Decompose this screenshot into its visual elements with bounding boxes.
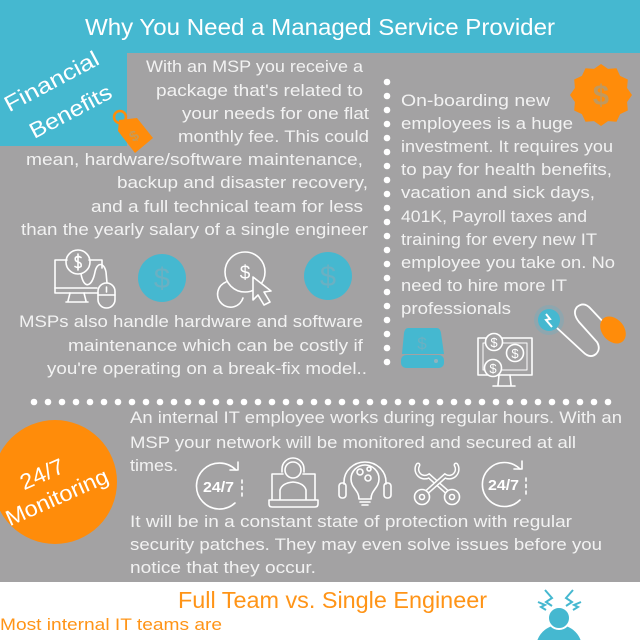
icon: support agent on laptop [269,458,318,507]
text block: MSP package: package that's related to [156,81,363,100]
icon: stressed person [536,590,582,640]
text block: internal IT employee [130,408,622,475]
text block: on-boarding: 401K, Payroll taxes and [401,207,587,226]
icon: teal dollar coin: $ [320,261,336,293]
panel: financial benefits label [0,46,127,146]
icon: 24/7 clock [196,462,242,509]
icon: monitor with coins: $ [511,346,519,361]
icon: coins with cursor: $ [240,263,251,284]
callout text: Monitoring [2,463,112,531]
text block: on-boarding [401,91,615,318]
label text [0,46,116,144]
icon: lightbulb with headphones [339,462,391,505]
icon: teal dollar coin: $ [154,263,170,295]
text block: internal IT employee: MSP your network will be monitored and secured at all [130,433,576,452]
title: Why You Need a Managed Service Provider [85,14,555,40]
text block: constant protection: notice that they occur. [130,558,316,577]
icon: monitor with coins: $ [490,335,498,350]
icon: crossed wrenches [414,465,460,504]
callout: 24/7 monitoring circle [0,420,117,544]
text block: internal IT employee: An internal IT employee works during regular hours. With an [130,408,622,427]
icon: coins with cursor [218,252,271,307]
icon: orange dollar badge: $ [593,80,609,112]
text block: most internal IT teams: Most internal IT teams are [0,615,222,634]
header band [0,0,640,53]
icon: orange dollar badge [570,64,632,126]
text block: maintenance [19,312,367,378]
text block: constant protection: It will be in a constant state of protection with regular [130,512,572,531]
text block: on-boarding: training for every new IT [401,230,597,249]
heading: full team vs single engineer: Full Team vs. Single Engineer [178,587,487,613]
text block: on-boarding: On-boarding new [401,91,551,110]
icon: teal dollar coin [138,254,186,302]
text block: MSP package: and a full technical team for less [91,197,363,216]
text block: MSP package: backup and disaster recovery, [117,173,368,192]
text block: maintenance: MSPs also handle hardware and software [19,312,363,331]
text block: on-boarding: employee you take on. No [401,253,615,272]
text block: MSP package: With an MSP you receive a [146,57,364,76]
text block: maintenance: maintenance which can be costly if [68,336,363,355]
text block: on-boarding: vacation and sick days, [401,183,595,202]
icon: teal dollar coin [304,252,352,300]
text block: on-boarding: to pay for health benefits, [401,160,612,179]
icon: price tag: $ [126,127,143,146]
text block: MSP package [21,57,369,239]
text block: maintenance: you're operating on a break-fix model.. [47,359,367,378]
icon: 24/7 clock: 24/7 [488,477,519,494]
icon: 24/7 clock [482,461,526,506]
text block: internal IT employee: times. [130,456,178,475]
icon: monitor with coins: $ [489,361,497,376]
icon: computer with coin and mouse [55,250,115,308]
icon: teal hard drive: $ [417,334,427,353]
text block: MSP package: mean, hardware/software maintenance, [26,150,363,169]
text block: on-boarding: investment. It requires you [401,137,613,156]
text block: MSP package: than the yearly salary of a single engineer [21,220,368,239]
text block: constant protection: security patches. They may even solve issues before you [130,535,602,554]
icon: monitor with coins [478,334,532,386]
text block: MSP package: your needs for one flat [182,104,369,123]
label text: Benefits [25,79,116,144]
text block: on-boarding: professionals [401,299,511,318]
icon: 24/7 clock: 24/7 [203,479,234,496]
icon: price tag [114,111,153,153]
label text: Financial [0,46,103,117]
icon: teal hard drive [401,328,444,368]
icon: plug and mouse cable [534,304,631,356]
callout text: 24/7 [16,453,68,495]
text block: constant protection [130,512,602,577]
text block: MSP package: monthly fee. This could [178,127,369,146]
text block: on-boarding: employees is a huge [401,114,573,133]
text block: on-boarding: need to hire more IT [401,276,567,295]
